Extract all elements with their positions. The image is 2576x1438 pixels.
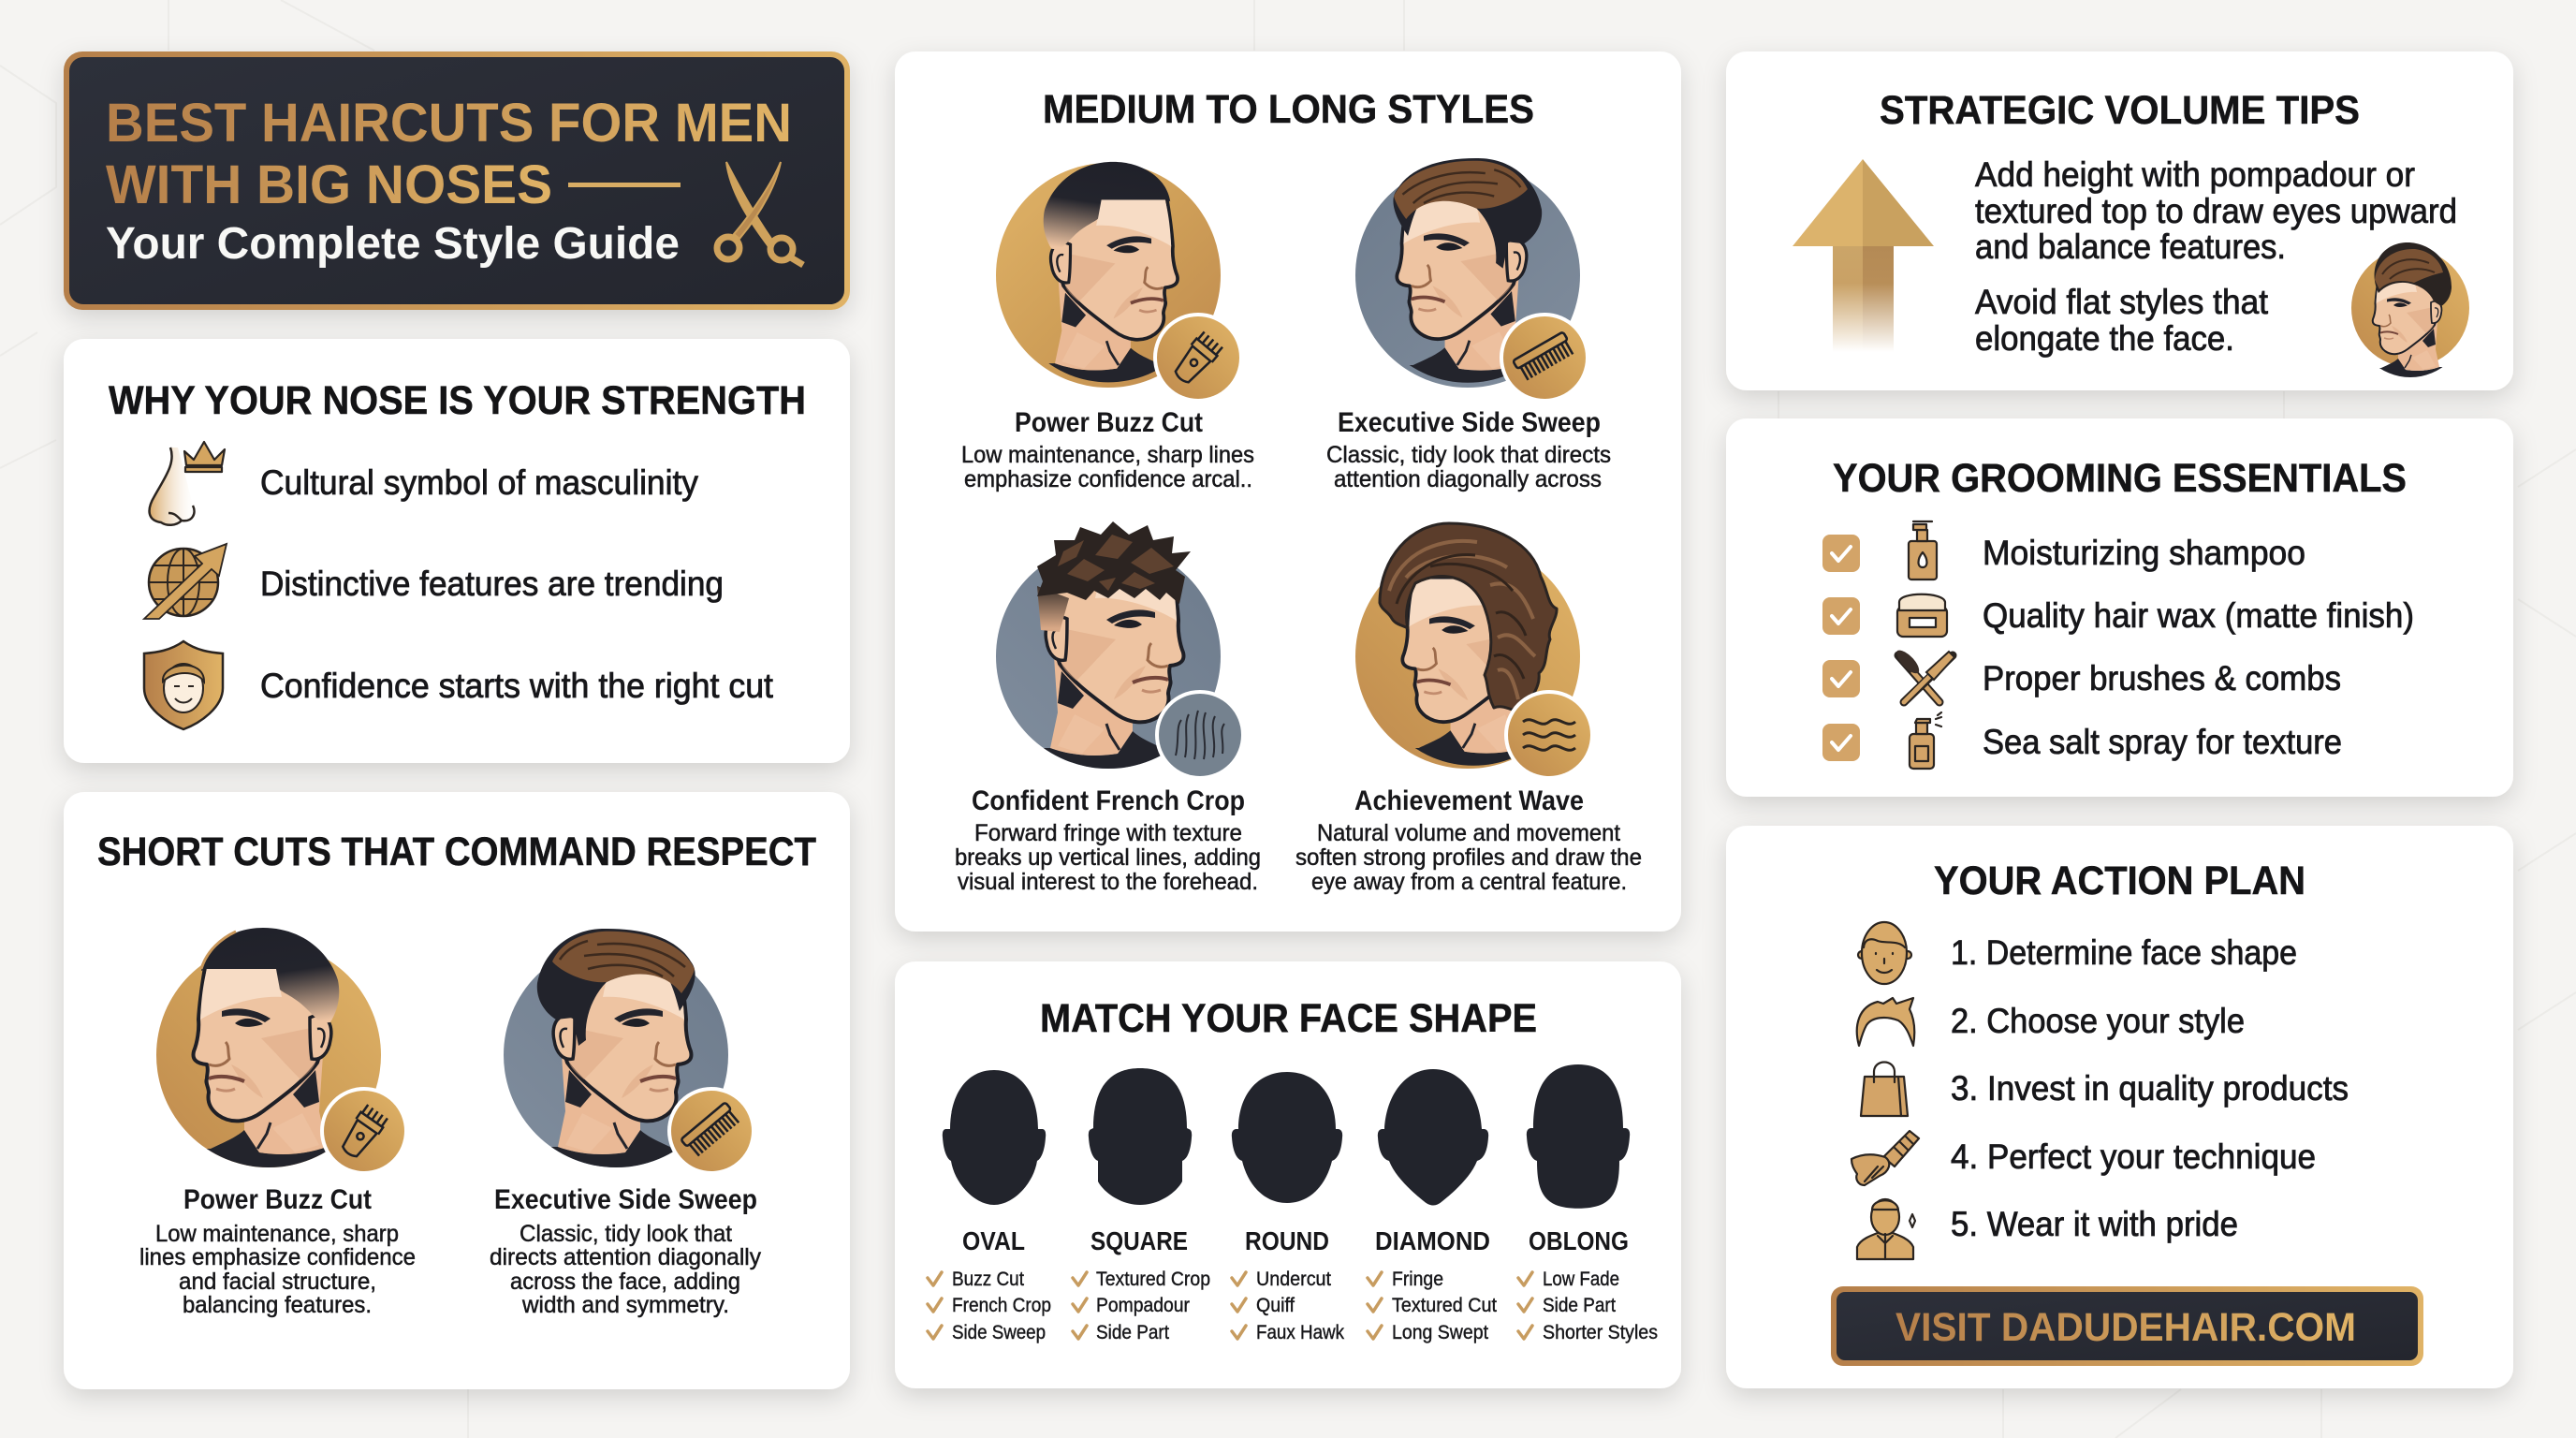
description: balancing features. [183, 1292, 372, 1318]
description: emphasize confidence arcal.. [964, 466, 1252, 492]
face: oval [943, 1070, 1046, 1205]
description: soften strong profiles and draw the [1295, 844, 1642, 871]
heading: MATCH YOUR FACE SHAPE [1040, 996, 1537, 1041]
text: Confidence starts with the right cut [260, 667, 774, 705]
icon: scissors [717, 162, 803, 265]
style lists: Pompadour [1096, 1295, 1190, 1316]
face: oblong [1527, 1064, 1630, 1209]
tip text: and balance features. [1975, 227, 2286, 266]
icon: hand with comb [1852, 1131, 1919, 1185]
panel: strategic volume tips [1726, 51, 2513, 390]
icon: hair [1857, 998, 1914, 1046]
tip text: Avoid flat styles that [1975, 283, 2269, 321]
face: diamond [1378, 1069, 1488, 1206]
description [1295, 820, 1642, 895]
description: lines emphasize confidence [139, 1244, 416, 1270]
text: 3. Invest in quality products [1951, 1069, 2349, 1108]
text: 2. Choose your style [1951, 1002, 2245, 1040]
badge: clipper [320, 1087, 408, 1175]
icon: brush and comb crossed [1897, 651, 1954, 702]
panel: title banner [64, 51, 850, 310]
badge: waves [1504, 690, 1594, 780]
icon: globe with arrow [144, 544, 227, 619]
description: Natural volume and movement [1317, 820, 1620, 846]
style name: Power Buzz Cut [183, 1184, 372, 1215]
description [139, 1221, 416, 1318]
icon: spray bottle [1910, 712, 1941, 769]
face: round [1232, 1072, 1342, 1203]
description: visual interest to the forehead. [958, 869, 1258, 895]
style lists: Fringe [1392, 1269, 1443, 1290]
portrait: power buzz cut [156, 928, 381, 1177]
style lists: Buzz Cut [952, 1269, 1024, 1290]
description: Classic, tidy look that [520, 1221, 732, 1247]
style name: Executive Side Sweep [1338, 407, 1601, 438]
face shape labels [962, 1226, 1629, 1255]
text: Quality hair wax (matte finish) [1983, 596, 2414, 635]
portrait: power buzz cut [996, 162, 1221, 391]
style lists: Side Part [1543, 1295, 1616, 1316]
checkboxes [1822, 535, 1860, 761]
description: eye away from a central feature. [1311, 869, 1627, 895]
panel: why your nose is your strength [64, 339, 850, 763]
portrait: executive side sweep [1355, 158, 1580, 391]
description: across the face, adding [510, 1269, 740, 1295]
text: 4. Perfect your technique [1951, 1137, 2316, 1176]
style lists: Undercut [1256, 1269, 1331, 1290]
face shape labels: OBLONG [1529, 1226, 1629, 1255]
face shape labels: OVAL [962, 1226, 1025, 1255]
panel: match your face shape [895, 961, 1681, 1388]
badge: hair texture [1155, 690, 1245, 780]
heading: SHORT CUTS THAT COMMAND RESPECT [97, 829, 816, 874]
description: and facial structure, [179, 1269, 376, 1295]
text: 1. Determine face shape [1951, 933, 2297, 972]
checkmarks [928, 1272, 1532, 1339]
description: breaks up vertical lines, adding [955, 844, 1261, 871]
text: Sea salt spray for texture [1983, 723, 2342, 761]
style lists: Side Sweep [952, 1322, 1046, 1343]
description [490, 1221, 761, 1318]
icon: shampoo bottle [1909, 521, 1937, 580]
style lists: French Crop [952, 1295, 1051, 1316]
style name: Achievement Wave [1354, 785, 1584, 816]
text: 5. Wear it with pride [1951, 1205, 2238, 1243]
style lists: Textured Cut [1392, 1295, 1497, 1316]
icon: face [1858, 922, 1911, 984]
button: visit website [1831, 1286, 2423, 1366]
portrait: pompadour [2351, 242, 2469, 382]
badge: comb [667, 1087, 755, 1175]
panel: grooming essentials [1726, 418, 2513, 797]
style lists: Long Swept [1392, 1322, 1488, 1343]
style lists: Textured Crop [1096, 1269, 1210, 1290]
face: square [1089, 1068, 1192, 1205]
description: directs attention diagonally [490, 1244, 761, 1270]
text: Distinctive features are trending [260, 565, 724, 603]
heading: YOUR ACTION PLAN [1934, 858, 2305, 903]
icon: up arrow [1793, 159, 1934, 352]
style name: Power Buzz Cut [1015, 407, 1203, 438]
description [955, 820, 1261, 895]
badge: comb [1500, 313, 1589, 403]
heading: YOUR GROOMING ESSENTIALS [1833, 456, 2407, 501]
icon: shopping bag [1861, 1062, 1908, 1116]
style lists: Side Part [1096, 1322, 1169, 1343]
description [961, 442, 1254, 492]
heading: WHY YOUR NOSE IS YOUR STRENGTH [109, 378, 806, 423]
tip text: elongate the face. [1975, 319, 2234, 358]
title heading: WITH BIG NOSES [106, 154, 552, 215]
panel: action plan [1726, 826, 2513, 1388]
title heading: BEST HAIRCUTS FOR MEN [106, 93, 792, 154]
style name: Confident French Crop [972, 785, 1245, 816]
badge: clipper [1153, 313, 1243, 403]
style lists: Shorter Styles [1543, 1322, 1658, 1343]
description: Forward fringe with texture [974, 820, 1242, 846]
style name: Executive Side Sweep [494, 1184, 757, 1215]
tip text: Add height with pompadour or [1975, 155, 2415, 194]
title heading [106, 93, 792, 215]
style lists [952, 1269, 1658, 1343]
face shape labels: SQUARE [1090, 1226, 1188, 1255]
description: attention diagonally across [1334, 466, 1602, 492]
portrait: achievement wave [1355, 523, 1580, 774]
text: Cultural symbol of masculinity [260, 463, 698, 502]
icon: shield with face [144, 641, 223, 729]
icon: confident man [1857, 1199, 1915, 1259]
description: Low maintenance, sharp lines [961, 442, 1254, 468]
tip text [1975, 155, 2457, 358]
icon: nose and crown [150, 442, 225, 525]
style lists: Low Fade [1543, 1269, 1619, 1290]
face shape labels: ROUND [1245, 1226, 1329, 1255]
style lists: Quiff [1256, 1295, 1295, 1316]
face shape labels: DIAMOND [1375, 1226, 1490, 1255]
portrait: confident french crop [996, 521, 1221, 778]
style lists: Faux Hawk [1256, 1322, 1344, 1343]
tip text: textured top to draw eyes upward [1975, 192, 2457, 230]
button: visit website: VISIT DADUDEHAIR.COM [1895, 1305, 2356, 1350]
description: width and symmetry. [521, 1292, 729, 1318]
icon: wax jar [1897, 594, 1947, 637]
description [1326, 442, 1611, 492]
panel: medium to long styles [895, 51, 1681, 932]
panel: short cuts [64, 792, 850, 1389]
description: Classic, tidy look that directs [1326, 442, 1611, 468]
text: Moisturizing shampoo [1983, 534, 2305, 572]
subtitle: Your Complete Style Guide [106, 219, 680, 269]
heading: STRATEGIC VOLUME TIPS [1880, 88, 2360, 133]
description: Low maintenance, sharp [155, 1221, 399, 1247]
text: Proper brushes & combs [1983, 659, 2341, 697]
portrait: executive side sweep [504, 929, 728, 1177]
heading: MEDIUM TO LONG STYLES [1043, 87, 1534, 132]
